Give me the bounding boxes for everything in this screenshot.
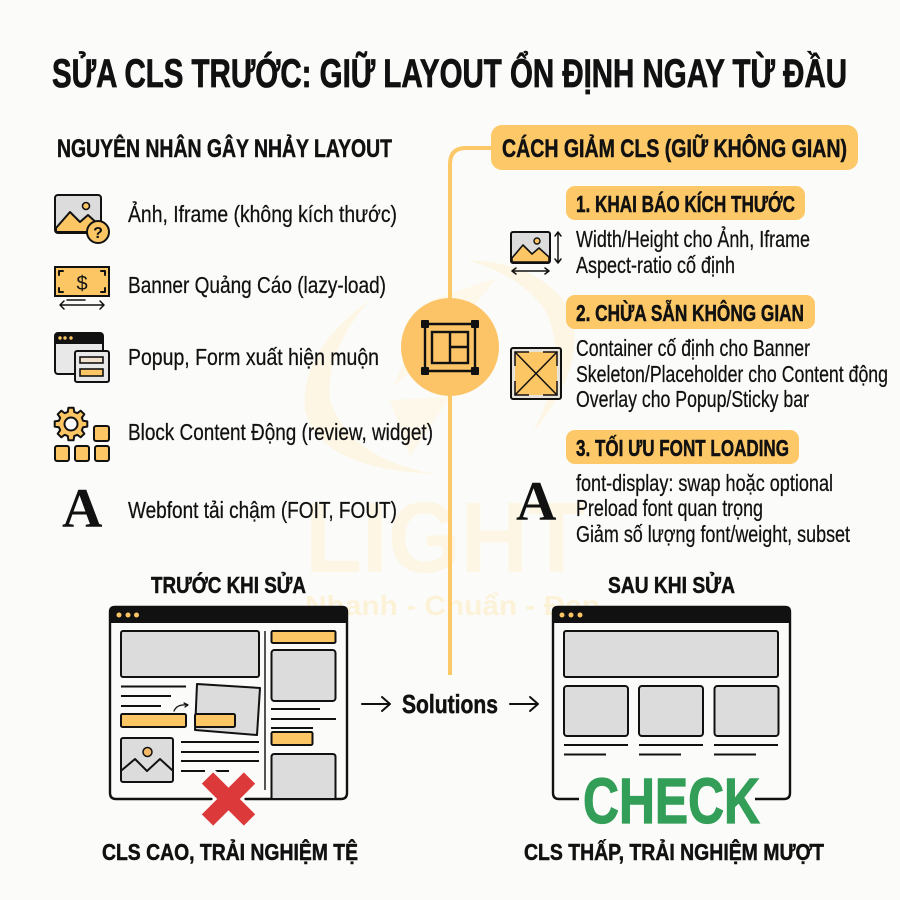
icon: image unknown size: ? [93,225,103,242]
text: step 1 details [576,224,810,278]
icon: red cross [208,778,250,820]
heading: before: TRƯỚC KHI SỬA [151,570,306,598]
icon: serif letter A: A [62,478,103,540]
step 2 pill [566,295,815,329]
step 2 pill: 2. CHỪA SẴN KHÔNG GIAN [576,299,804,326]
icon: gear and blocks [55,408,109,461]
text: step 2 details: Overlay cho Popup/Sticky bar [576,386,809,412]
icon: image unknown size [55,195,109,243]
caption: before: CLS CAO, TRẢI NGHIỆM TỆ [102,837,358,865]
panel: before [102,570,358,865]
watermark: LIGHT logo [305,260,600,621]
icon: serif letter A: A [516,471,557,533]
step 1 pill: 1. KHAI BÁO KÍCH THƯỚC [576,190,795,217]
icon: layout circle [401,298,499,396]
caption: after: CLS THẤP, TRẢI NGHIỆM MƯỢT [524,837,824,865]
step 1 pill [566,186,805,220]
label: solutions with arrows: Solutions [402,689,498,719]
icon: image with dimensions [511,232,561,274]
browser window: stable layout [553,607,790,799]
watermark: LIGHT logo: Nhanh - Chuẩn - Đẹp [305,590,600,621]
connector line [450,148,491,675]
panel: after [524,570,824,865]
text: dynamic content cause: Block Content Động (review, widget) [128,419,433,445]
text: step 3 details: Preload font quan trọng [576,495,763,521]
panel: solutions [491,125,888,547]
heading pill: solutions [491,125,858,170]
step 3 pill [566,430,799,464]
step 3 pill: 3. TỐI ƯU FONT LOADING [576,434,789,461]
label: solutions with arrows [362,689,538,719]
watermark: LIGHT logo: LIGHT [305,482,585,594]
heading: after: SAU KHI SỬA [608,570,735,598]
heading: causes: NGUYÊN NHÂN GÂY NHẢY LAYOUT [57,133,392,163]
text: popup cause: Popup, Form xuất hiện muộn [128,344,379,370]
text: step 3 details [576,470,850,547]
text: step 1 details: Aspect-ratio cố định [576,252,735,278]
browser window: unstable layout [110,607,347,799]
icon: popup window [55,333,109,382]
text: step 2 details [576,335,888,412]
icon: reserved space box [511,348,561,399]
badge: CHECK: CHECK [583,765,760,837]
panel: causes [55,133,433,540]
text: banner cause: Banner Quảng Cáo (lazy-load) [128,272,386,298]
text: step 1 details: Width/Height cho Ảnh, Iframe [576,224,810,252]
icon: ad banner [55,267,109,309]
icon: ad banner: $ [76,273,88,295]
text: image cause: Ảnh, Iframe (không kích thước) [128,199,397,227]
text: step 2 details: Container cố định cho Banner [576,335,810,361]
text: webfont cause: Webfont tải chậm (FOIT, FOUT) [128,497,397,523]
text: step 3 details: font-display: swap hoặc optional [576,470,833,496]
